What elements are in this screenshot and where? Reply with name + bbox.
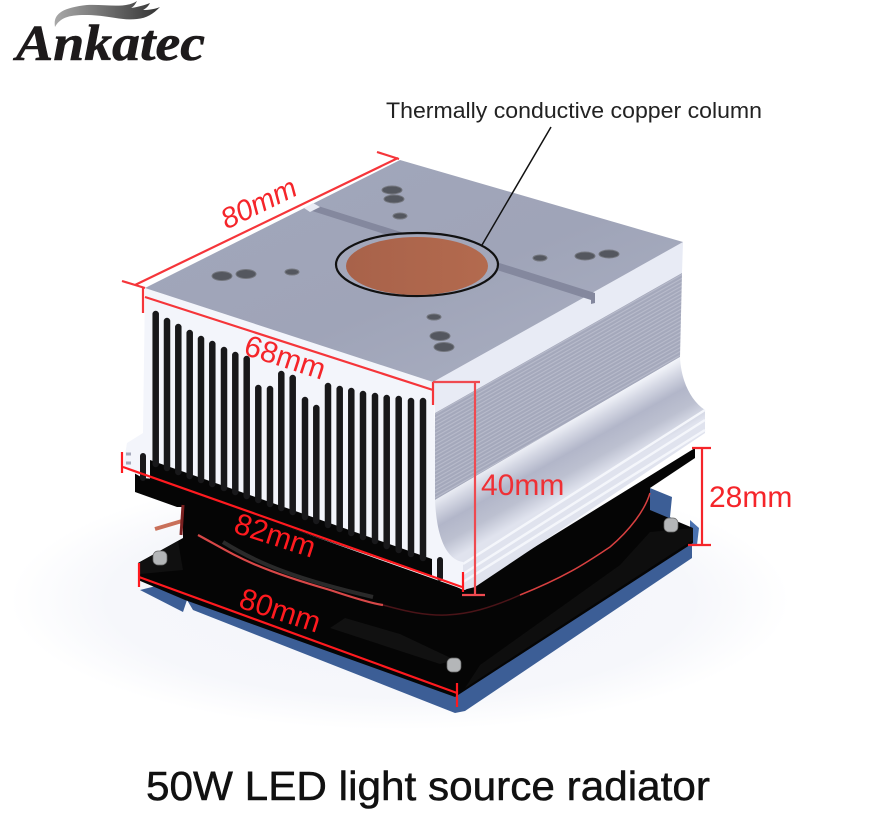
label: 40mm: 40mm (481, 469, 564, 502)
dimension: 82mm (122, 452, 463, 592)
heat sink front face (123, 288, 463, 590)
dimension: 40mm (433, 382, 485, 595)
logo swoosh (55, 1, 160, 27)
heat sink right band (433, 242, 683, 413)
copper column (346, 237, 488, 295)
floor glow (10, 470, 790, 730)
dimension: top 80mm (122, 152, 399, 288)
label: 82mm: 82mm (230, 507, 320, 565)
flared base (435, 357, 705, 590)
groove highlight (304, 203, 320, 212)
fan wires (155, 493, 650, 615)
label: 68mm: 68mm (240, 329, 330, 387)
dimension: 28mm (688, 448, 711, 545)
label: 28mm: 28mm (709, 481, 792, 514)
side slots (143, 456, 440, 578)
heat sink (123, 160, 705, 590)
label: bottom 80mm: 80mm (235, 582, 325, 640)
dimension: bottom 80mm (139, 563, 457, 707)
top face (145, 160, 683, 382)
product: fan body (135, 448, 695, 697)
base ridges (463, 410, 705, 582)
fin slots (156, 314, 423, 558)
logo wordmark: Ankatec (13, 16, 205, 72)
holes (212, 186, 619, 352)
callout leader line (482, 127, 551, 245)
logo: Ankatec (13, 1, 205, 72)
title: 50W LED light source radiator (146, 763, 710, 809)
callout text: Thermally conductive copper column (386, 98, 762, 123)
side marks (126, 454, 131, 463)
dimension: 68mm (143, 288, 433, 405)
product: shadow under fan (140, 488, 699, 713)
fin shadow band (150, 460, 432, 577)
fan plate highlights (138, 541, 183, 574)
label: top 80mm: 80mm (216, 172, 302, 236)
fan screws (153, 518, 678, 672)
ribbed side (435, 273, 682, 500)
copper column ring (336, 233, 498, 296)
fan housing (135, 448, 695, 697)
top groove (306, 206, 595, 304)
